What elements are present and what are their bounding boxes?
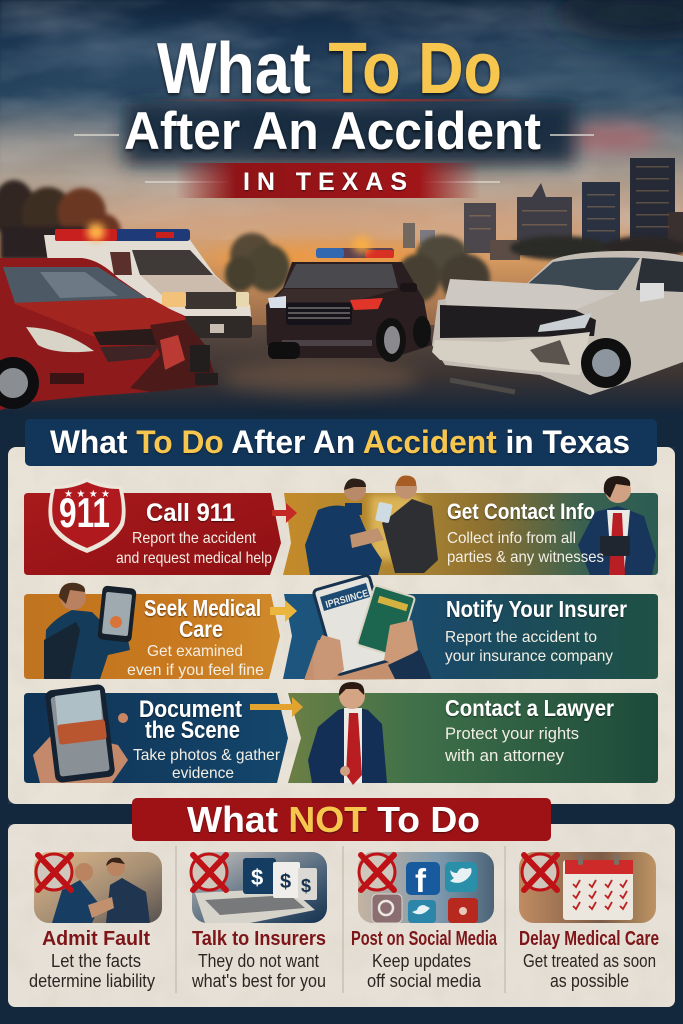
heading text: What To Do After An Accident in Texas	[50, 424, 630, 460]
description: Get examined	[147, 643, 243, 660]
icon: 911 shield	[48, 478, 126, 553]
hero scene	[0, 0, 683, 415]
description: Let the facts	[51, 951, 141, 971]
description: your insurance company	[445, 648, 613, 665]
illustration: insurance papers in hands: IPRSIINCE	[324, 588, 370, 611]
icon: red x	[36, 854, 72, 890]
description: Take photos & gather	[133, 747, 281, 764]
description	[523, 951, 656, 991]
illustration: phone photo	[33, 684, 128, 783]
description: what's best for you	[191, 971, 326, 991]
panel: what to do	[8, 419, 675, 804]
icon: red x	[359, 854, 395, 890]
description: as possible	[550, 971, 629, 991]
description: Keep updates	[372, 951, 471, 971]
subtitle: IN TEXAS	[243, 168, 407, 196]
description	[116, 530, 272, 567]
description: determine liability	[29, 971, 155, 991]
description: Report the accident to	[445, 629, 597, 646]
photo: social icons	[358, 852, 494, 923]
heading: Call 911	[146, 499, 235, 527]
item: talk to insurers	[191, 852, 327, 991]
column dividers	[176, 846, 505, 993]
photo: calendar	[519, 852, 656, 923]
description: and request medical help	[116, 550, 272, 567]
illustration: man with phone	[44, 583, 137, 679]
arrow: call to contact	[272, 503, 297, 523]
description: Get treated as soon	[523, 951, 656, 971]
illustration: officer and driver	[305, 475, 438, 575]
heading: Contact a Lawyer	[445, 695, 614, 721]
photo: arguing men	[34, 852, 162, 923]
step: get contact info	[283, 475, 658, 575]
item: delay medical care	[519, 852, 659, 991]
photo: money and papers: $	[301, 876, 311, 896]
photo: money and papers: $	[251, 865, 263, 890]
description	[367, 951, 482, 991]
description	[447, 530, 604, 566]
icon: 911 shield: ★★★★	[64, 489, 110, 500]
heading: Get Contact Info	[447, 499, 595, 524]
item: post on social media	[351, 852, 498, 991]
photo: money and papers: $	[280, 871, 291, 893]
red rule	[144, 99, 544, 102]
glow behind figures	[370, 495, 420, 560]
heading: Document	[139, 696, 242, 723]
heading banner	[132, 798, 551, 841]
panel: what not to do	[8, 798, 675, 1007]
heading banner	[25, 419, 657, 466]
description: parties & any witnesses	[447, 549, 604, 566]
step: document the scene	[24, 684, 288, 783]
title block	[74, 29, 594, 198]
title: Talk to Insurers	[192, 928, 326, 950]
photo: social icons: f	[415, 862, 427, 899]
title side rules	[74, 135, 594, 182]
title line one: What To Do	[157, 29, 502, 109]
trees	[0, 180, 683, 302]
title dark band	[125, 103, 575, 165]
description: Report the accident	[132, 530, 256, 547]
photo: money and papers	[192, 852, 327, 923]
arrow: scene to lawyer	[250, 697, 303, 717]
heading: Care	[179, 616, 223, 642]
road	[26, 325, 683, 407]
title: Post on Social Media	[351, 928, 498, 950]
description: evidence	[172, 765, 234, 782]
description: They do not want	[198, 951, 319, 971]
heading: Notify Your Insurer	[446, 596, 627, 622]
illustration: insurance papers in hands	[304, 575, 432, 680]
ambulance	[44, 223, 252, 338]
item: admit fault	[29, 852, 162, 991]
step: seek medical care	[24, 583, 280, 679]
step: contact a lawyer	[288, 682, 658, 785]
icon: red x	[191, 854, 227, 890]
heading: the Scene	[145, 717, 240, 744]
icon: red x	[522, 854, 558, 890]
description: with an attorney	[444, 747, 565, 765]
description: even if you feel fine	[127, 662, 264, 679]
step: call 911	[24, 478, 281, 575]
step: notify your insurer	[283, 575, 658, 680]
description: off social media	[367, 971, 482, 991]
icon: 911 shield: 911	[59, 489, 110, 536]
description	[444, 725, 579, 765]
figure: lawyer	[308, 682, 387, 785]
description	[29, 951, 155, 991]
heading	[139, 696, 242, 744]
city skyline	[403, 158, 683, 260]
crashed red car	[0, 258, 218, 410]
description	[445, 629, 613, 665]
crashed white car	[432, 251, 683, 395]
title line two: After An Accident	[124, 102, 541, 161]
heading: Seek Medical	[144, 595, 261, 621]
description	[133, 747, 281, 782]
police SUV	[266, 236, 432, 362]
heading	[144, 595, 261, 642]
arrow: medical to insurer	[270, 600, 297, 622]
description: Protect your rights	[445, 725, 579, 743]
heading text: What NOT To Do	[187, 799, 480, 840]
subtitle band	[175, 163, 480, 198]
figure: attorney	[578, 476, 656, 575]
description: Collect info from all	[447, 530, 576, 547]
description	[191, 951, 326, 991]
title: Admit Fault	[42, 928, 150, 950]
description	[127, 643, 264, 679]
